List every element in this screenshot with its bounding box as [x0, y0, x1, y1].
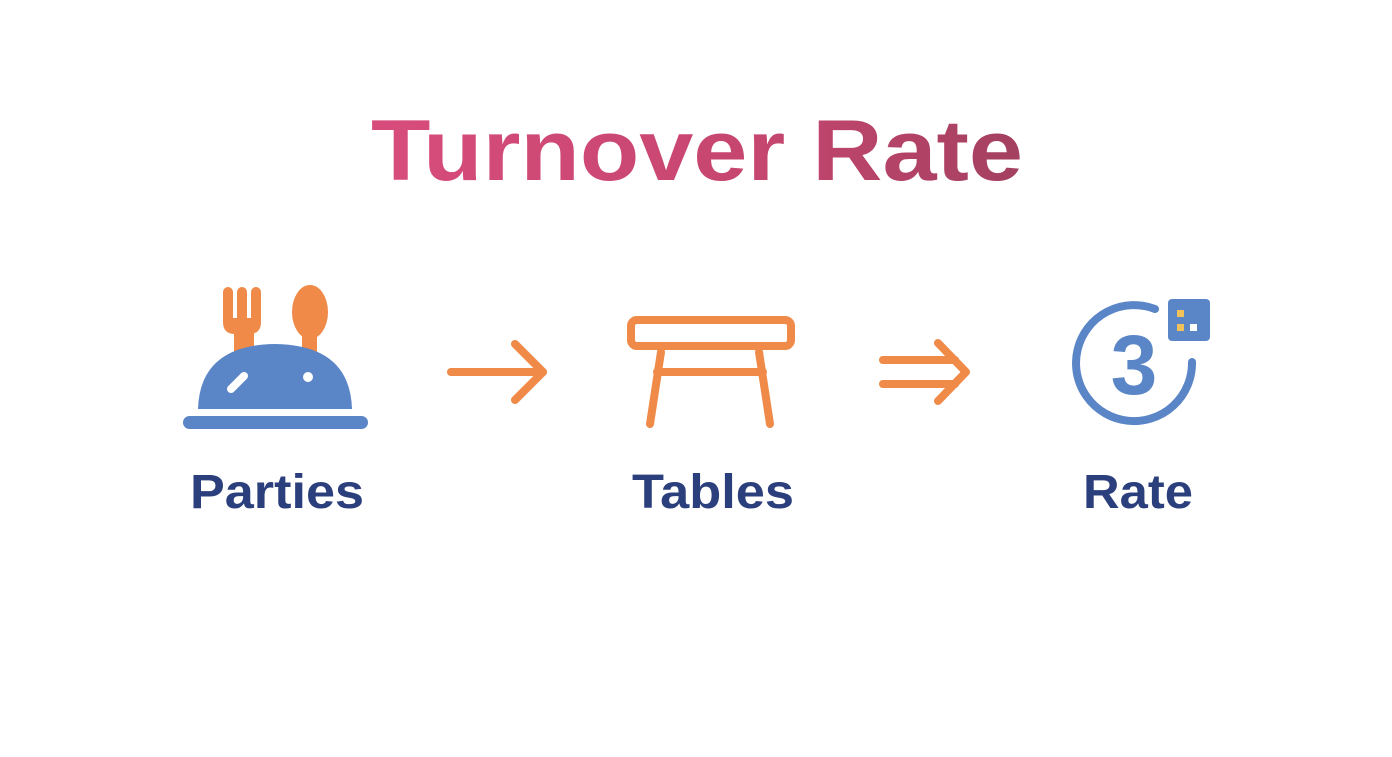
- arrow 2: [883, 343, 966, 401]
- icon: table: [631, 320, 791, 424]
- arrow 1: [451, 344, 543, 400]
- icon: rate 3: [1076, 299, 1210, 421]
- icon: cloche with fork and spoon: [183, 285, 368, 429]
- label: Rate: Rate: [1083, 466, 1193, 519]
- label: Parties: Parties: [190, 466, 364, 519]
- label: Tables: Tables: [632, 466, 794, 519]
- icon: rate 3: 3: [1111, 318, 1157, 412]
- title: Turnover Rate: [371, 103, 1023, 199]
